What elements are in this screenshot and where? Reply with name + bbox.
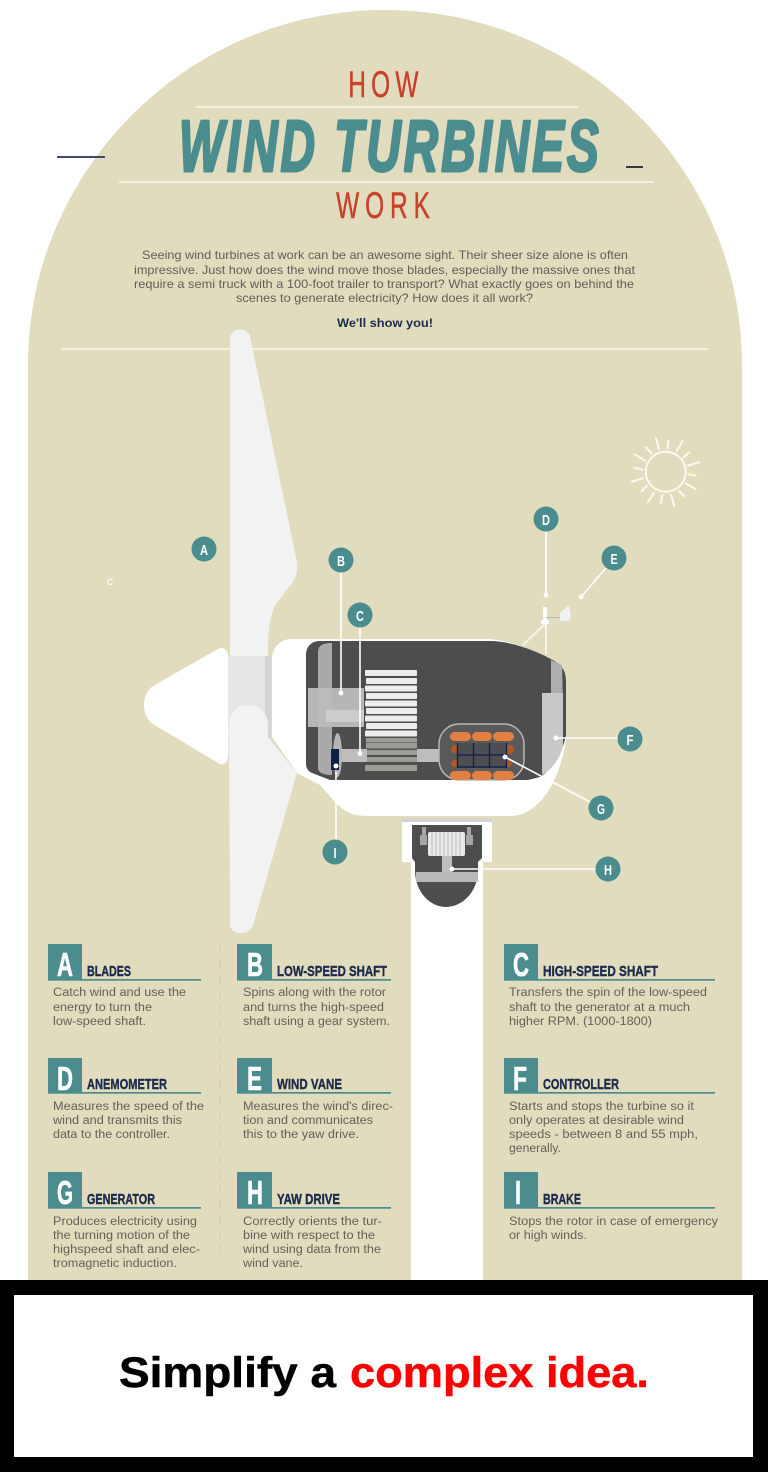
badge B: B: [337, 553, 345, 570]
legend entry F: [504, 1058, 715, 1155]
legend entry B: shaft using a gear system.: [243, 1016, 390, 1028]
badge H: H: [604, 862, 612, 879]
legend entry B: [237, 944, 391, 1028]
badge B: [328, 548, 354, 572]
legend entry H: H: [247, 1174, 263, 1211]
low-speed shaft: [308, 688, 364, 727]
title: work: WORK: [336, 185, 436, 226]
title: how: HOW: [348, 64, 424, 105]
legend entry C: higher RPM. (1000-1800): [509, 1016, 652, 1028]
legend entry H: YAW DRIVE: [277, 1191, 340, 1208]
icon: sun: [632, 438, 699, 506]
upper blade: [230, 329, 297, 660]
badge F: F: [626, 732, 634, 749]
legend entry B: Spins along with the rotor: [243, 987, 386, 999]
intro paragraph: impressive. Just how does the wind move those blades, especially the massive ones that: [134, 263, 636, 277]
turbine illustration: [144, 329, 571, 933]
we'll show you: We'll show you!: [337, 316, 433, 330]
legend entry I: BRAKE: [543, 1191, 581, 1208]
legend entry G: GENERATOR: [87, 1191, 155, 1208]
legend entry B: B: [247, 946, 263, 983]
legend entry H: wind using data from the: [242, 1244, 381, 1256]
legend entry A: A: [57, 946, 73, 983]
legend entry F: F: [513, 1060, 527, 1097]
badge A: A: [200, 542, 208, 559]
legend entry F: only operates at desirable wind: [509, 1115, 684, 1127]
badge F: [618, 726, 642, 752]
intro paragraph: scenes to generate electricity? How does it all work?: [236, 291, 533, 305]
wind mark: c: [107, 574, 113, 588]
nose cone: [144, 648, 228, 764]
legend entry I: Stops the rotor in case of emergency: [509, 1216, 718, 1228]
legend entry G: highspeed shaft and elec-: [53, 1244, 200, 1256]
badge G: [588, 796, 614, 820]
legend entry I: [504, 1172, 718, 1242]
caption banner: Simplify a: [119, 1349, 337, 1397]
stray dash left: [57, 156, 105, 158]
legend entry C: HIGH-SPEED SHAFT: [543, 963, 658, 980]
callout badges: [192, 506, 642, 882]
legend entry F: speeds - between 8 and 55 mph,: [509, 1129, 698, 1141]
legend entry D: [48, 1058, 204, 1141]
intro paragraph: Seeing wind turbines at work can be an awesome sight. Their sheer size alone is often: [142, 248, 628, 262]
legend entry E: this to the yaw drive.: [243, 1129, 359, 1141]
title block: [119, 64, 654, 226]
legend entry D: Measures the speed of the: [53, 1101, 204, 1113]
legend entry C: Transfers the spin of the low-speed: [509, 987, 707, 999]
legend entry D: wind and transmits this: [52, 1115, 182, 1127]
intro paragraph: require a semi truck with a 100-foot trailer to transport? What exactly goes on behind the: [134, 277, 634, 291]
legend entry G: the turning motion of the: [53, 1230, 190, 1242]
high-speed shaft: [340, 749, 458, 762]
stray dash right: [626, 166, 643, 168]
legend entry E: WIND VANE: [277, 1076, 342, 1093]
legend entry H: Correctly orients the tur-: [243, 1216, 382, 1228]
legend entry C: shaft to the generator at a much: [509, 1002, 690, 1014]
caption banner: [0, 1280, 768, 1472]
badge A: [192, 536, 216, 562]
rotor flange: [318, 643, 332, 775]
legend entry D: ANEMOMETER: [87, 1076, 167, 1093]
yaw drive: [402, 818, 492, 907]
legend entry A: Catch wind and use the: [53, 987, 186, 999]
legend entry A: low-speed shaft.: [53, 1016, 146, 1028]
legend entry H: [237, 1172, 391, 1270]
legend entry G: Produces electricity using: [53, 1216, 197, 1228]
legend entry H: bine with respect to the: [243, 1230, 375, 1242]
caption banner: complex idea.: [350, 1349, 649, 1397]
legend entry B: LOW-SPEED SHAFT: [277, 963, 387, 980]
legend entry F: Starts and stops the turbine so it: [509, 1101, 695, 1113]
nacelle body: [272, 639, 566, 816]
title: wind turbines: WIND TURBINES: [179, 106, 599, 186]
badge I: I: [334, 845, 336, 862]
legend entry E: Measures the wind's direc-: [243, 1101, 393, 1113]
legend entry A: [48, 944, 201, 1028]
badge C: [348, 602, 372, 628]
callout leaders: [334, 531, 622, 872]
lower blade: [229, 705, 297, 933]
legend entry C: C: [513, 946, 529, 983]
controller: [542, 660, 563, 775]
legend entry E: tion and communicates: [243, 1115, 373, 1127]
legend entry E: [237, 1058, 393, 1141]
legend entry C: [504, 944, 715, 1028]
legend entry G: G: [57, 1174, 73, 1211]
badge I: [322, 840, 348, 864]
legend entry I: I: [515, 1174, 521, 1211]
legend entry G: [48, 1172, 201, 1270]
generator: [439, 724, 524, 780]
nacelle interior: [306, 641, 566, 780]
legend entry B: and turns the high-speed: [243, 1002, 384, 1014]
anemometer and wind vane: [523, 605, 571, 654]
badge G: G: [597, 801, 605, 818]
badge H: [596, 856, 620, 882]
legend entry H: wind vane.: [242, 1258, 303, 1270]
badge C: C: [356, 608, 364, 625]
badge D: [534, 506, 558, 532]
turbine tower: [411, 860, 483, 1280]
legend entry G: tromagnetic induction.: [53, 1258, 177, 1270]
badge E: [602, 546, 626, 570]
brake: [331, 733, 342, 777]
legend entry F: CONTROLLER: [543, 1076, 619, 1093]
intro paragraph: [134, 248, 636, 305]
legend entry D: data to the controller.: [53, 1129, 170, 1141]
hub connection: [228, 656, 271, 757]
gearbox: [365, 670, 417, 771]
badge E: E: [610, 551, 618, 568]
legend entry I: or high winds.: [509, 1230, 587, 1242]
legend entry A: energy to turn the: [53, 1002, 152, 1014]
legend entry E: E: [247, 1060, 262, 1097]
legend entry D: D: [57, 1060, 73, 1097]
badge D: D: [542, 512, 550, 529]
legend entry F: generally.: [509, 1143, 561, 1155]
legend entry A: BLADES: [87, 963, 131, 980]
